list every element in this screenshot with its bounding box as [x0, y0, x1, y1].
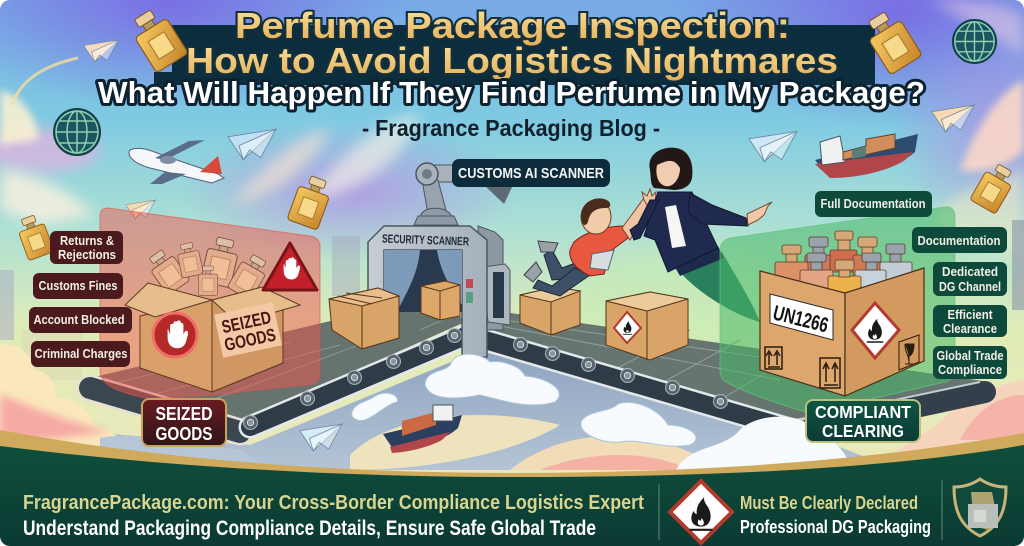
compliant box: [760, 268, 924, 396]
scanner opening: [384, 250, 462, 312]
panel: compliant zone: [720, 207, 955, 413]
back leg: [544, 250, 580, 280]
title panel: [154, 25, 875, 85]
security scanner: [368, 163, 510, 357]
icon: paper plane 5: [932, 105, 974, 132]
customs AI scanner callout: [452, 159, 610, 204]
left belt roller: [90, 388, 240, 432]
icon: globe right: [953, 20, 996, 63]
face: [656, 161, 680, 186]
navy skirt top: [672, 246, 724, 276]
seized goods badge: [142, 399, 226, 446]
tag: returns & rejections: Rejections: [58, 247, 116, 262]
icon: globe left: [54, 109, 100, 155]
scanner side depth: [478, 226, 503, 330]
left arm: [630, 200, 659, 240]
boy character: [524, 189, 656, 296]
green overlay: [720, 207, 955, 413]
left belt rail: [250, 334, 470, 427]
compliant clearing badge: COMPLIANT: [815, 402, 911, 422]
sparkle trail: [12, 58, 78, 105]
parcel on left belt: [329, 288, 399, 349]
fragile mark: [899, 335, 919, 370]
lower cloud bank: [0, 345, 1024, 470]
clouds under conveyor: [352, 354, 850, 470]
gold edge: [0, 430, 1024, 477]
blazer: [644, 192, 718, 272]
tag: full documentation: [815, 191, 932, 217]
benefits tags: [815, 191, 1007, 379]
pointing arm: [688, 193, 748, 226]
icon: cargo ship top right: [815, 134, 918, 178]
up arrows marks: [765, 347, 840, 388]
seized box: [125, 283, 300, 392]
tag: efficient clearance: Efficient: [948, 307, 993, 322]
hazard diamond: [852, 303, 899, 358]
title line 1: Perfume Package Inspection:: [235, 5, 790, 46]
tag: efficient clearance: [933, 305, 1007, 337]
declaration line 2: Professional DG Packaging: [740, 517, 931, 537]
white shirt: [665, 205, 686, 248]
presenter character: [630, 148, 772, 322]
raised hand: [642, 189, 656, 207]
scanner label: SECURITY SCANNER: [382, 232, 469, 249]
raised arm: [622, 198, 652, 240]
tag: documentation: [912, 227, 1007, 253]
tag: customs fines: Customs Fines: [38, 278, 118, 293]
tag: criminal charges: Criminal Charges: [34, 346, 128, 361]
title line 2: How to Avoid Logistics Nightmares: [186, 40, 838, 81]
icon: perfume bottle top right: [861, 7, 922, 75]
conveyor belts: [90, 295, 990, 432]
footer line 2: Understand Packaging Compliance Details, Ensure Safe Global Trade: [23, 517, 596, 540]
tag: dedicated DG channel: DG Channel: [939, 279, 1001, 294]
icon: flammable diamond: [670, 481, 732, 543]
tag: full documentation: Full Documentation: [820, 196, 926, 211]
subtitle question: What Will Happen If They Find Perfume in My Package?: [98, 75, 925, 110]
tag: account blocked: Account Blocked: [34, 312, 125, 327]
hair: [649, 148, 692, 190]
right belt rail: [485, 340, 800, 432]
icon: perfume bottle mid: [287, 173, 334, 230]
icon: perfume bottle right: [970, 160, 1018, 214]
icon: paper plane 2: [228, 129, 276, 160]
customs AI scanner callout: CUSTOMS AI SCANNER: [458, 165, 604, 182]
compliant clearing badge: [806, 400, 920, 442]
panel: seized goods zone: [100, 208, 320, 399]
consequences tags: [29, 231, 132, 367]
tablet: [590, 250, 614, 270]
declaration line 1: Must Be Clearly Declared: [740, 493, 918, 513]
tag: efficient clearance: Clearance: [943, 321, 997, 336]
parcel on right belt: [520, 287, 580, 335]
tag: global trade compliance: [933, 346, 1007, 379]
icon: perfume bottle top left: [127, 5, 188, 73]
green skirt swoosh: [678, 252, 760, 322]
footer line 1: FragrancePackage.com: Your Cross-Border Compliance Logistics Expert: [23, 491, 644, 514]
tag: dedicated DG channel: Dedicated: [942, 264, 998, 279]
seized goods badge: GOODS: [156, 424, 212, 444]
icon: cargo ship bottom: [383, 405, 462, 453]
footer band: [0, 430, 1024, 546]
red overlay: [100, 208, 320, 399]
stop hand icon: [153, 313, 197, 357]
tag: dedicated DG channel: [933, 262, 1007, 296]
tag: documentation: Documentation: [918, 233, 1001, 248]
tag: returns & rejections: Returns &: [60, 233, 114, 248]
seized goods badge: SEIZED: [156, 404, 212, 424]
red shirt: [570, 226, 628, 276]
right belt end roller: [800, 392, 985, 432]
tag: returns & rejections: [50, 231, 123, 264]
head: [581, 200, 611, 234]
icon: airplane: [129, 140, 224, 184]
green band: [0, 445, 1024, 546]
seized label on box: GOODS: [223, 325, 278, 355]
icon: paper plane 6: [300, 424, 342, 451]
icon: paper plane 1: [84, 40, 118, 62]
icon: paper plane 3: [126, 200, 155, 219]
robot arm: [414, 163, 460, 225]
front leg: [533, 268, 590, 296]
hazard label: [614, 312, 641, 343]
left belt surface: [90, 295, 465, 420]
icon: perfume bottle left: [15, 213, 54, 261]
compliant clearing badge: CLEARING: [822, 421, 904, 441]
icon: paper plane 4: [749, 131, 797, 162]
seized label on box: [214, 302, 282, 358]
UN number label: UN1266: [771, 302, 831, 337]
tag: global trade compliance: Global Trade: [936, 348, 1004, 363]
scanner arch: [368, 226, 487, 357]
hazard parcel on right belt: [606, 292, 688, 360]
side portal: [483, 264, 510, 325]
parcel in scanner: [421, 281, 460, 320]
warning triangle: [263, 243, 317, 290]
shoes: [538, 241, 558, 252]
right belt surface: [485, 310, 990, 422]
tag: global trade compliance: Compliance: [938, 362, 1002, 377]
bottles in seized box: [144, 235, 271, 301]
bottles on compliant box: [775, 231, 912, 294]
seized label on box: SEIZED: [220, 307, 273, 337]
pointing hand: [747, 202, 772, 225]
icon: shield: [954, 479, 1006, 536]
blog label: - Fragrance Packaging Blog -: [362, 115, 660, 141]
